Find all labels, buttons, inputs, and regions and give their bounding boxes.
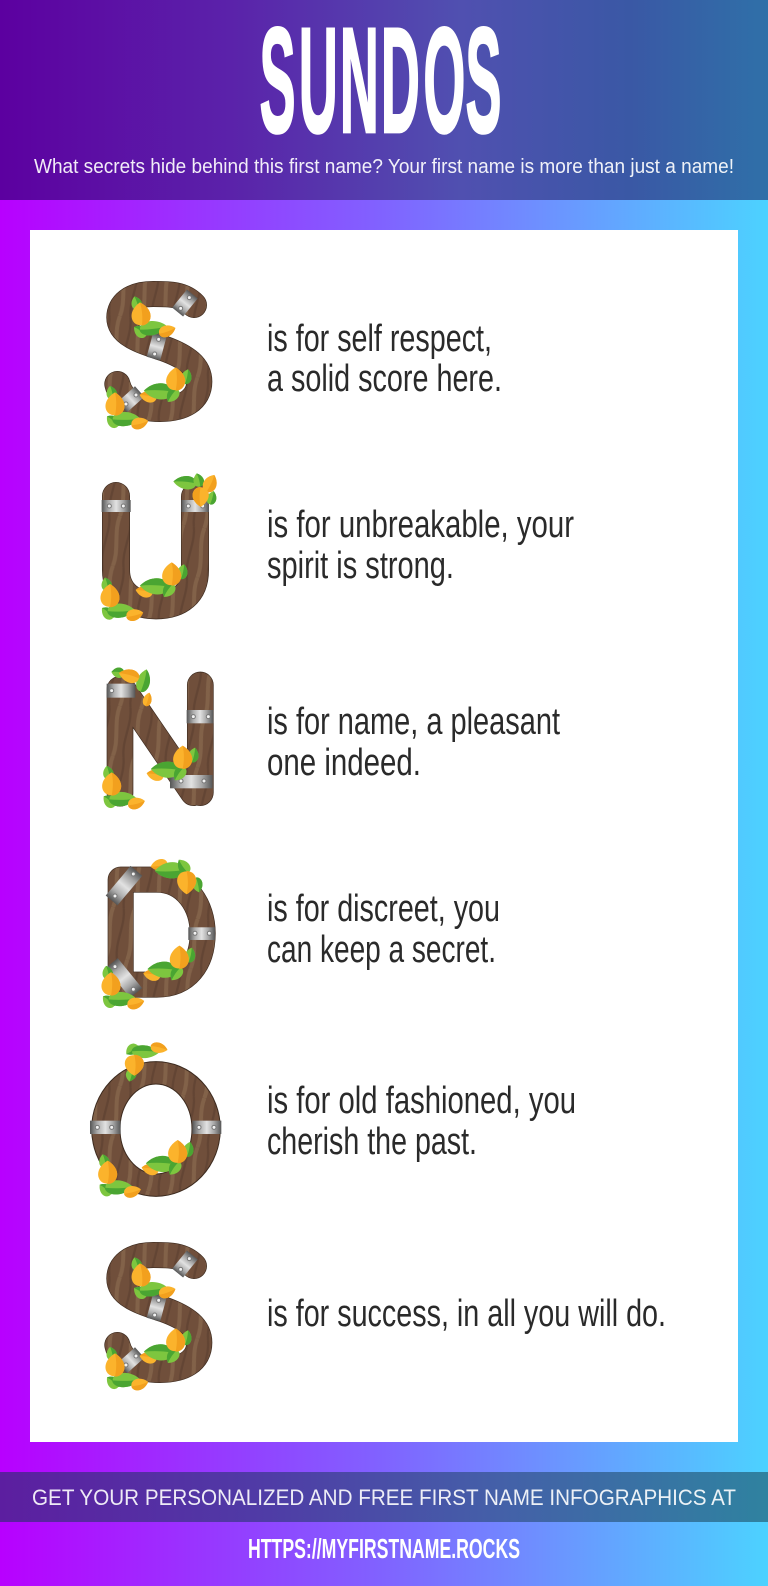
footer call-to-action band: [0, 1472, 768, 1522]
text: U line: spirit is strong.: [267, 545, 454, 587]
letter S icon: [103, 290, 199, 431]
header band: [0, 0, 768, 200]
letter D icon: [99, 856, 215, 1011]
letter S icon (second): [103, 1251, 199, 1392]
text: D line: can keep a secret.: [267, 929, 496, 971]
text: U line: is for unbreakable, your: [267, 504, 574, 546]
text: O line: is for old fashioned, you: [267, 1080, 576, 1122]
text: N line: [267, 701, 560, 784]
text: U line: [267, 504, 574, 587]
letter N icon: [100, 667, 213, 811]
letter U icon: [98, 472, 220, 623]
white content panel: [30, 230, 738, 1442]
text: S line: is for self respect,: [267, 318, 492, 360]
text: D line: [267, 888, 500, 971]
text: N line: is for name, a pleasant: [267, 701, 560, 743]
text: D line: is for discreet, you: [267, 888, 500, 930]
letter O icon: [90, 1041, 221, 1199]
title: SUNDOS: [260, 0, 501, 164]
text: O line: cherish the past.: [267, 1121, 477, 1163]
text: S line: [267, 318, 502, 400]
text: N line: one indeed.: [267, 742, 421, 784]
text: S line: a solid score here.: [267, 358, 502, 400]
subtitle: What secrets hide behind this first name? Your first name is more than just a name!: [34, 156, 734, 178]
footer call-to-action band: GET YOUR PERSONALIZED AND FREE FIRST NAME INFOGRAPHICS AT: [32, 1485, 736, 1510]
footer URL: HTTPS://MYFIRSTNAME.ROCKS: [248, 1533, 520, 1564]
text: O line: [267, 1080, 576, 1163]
